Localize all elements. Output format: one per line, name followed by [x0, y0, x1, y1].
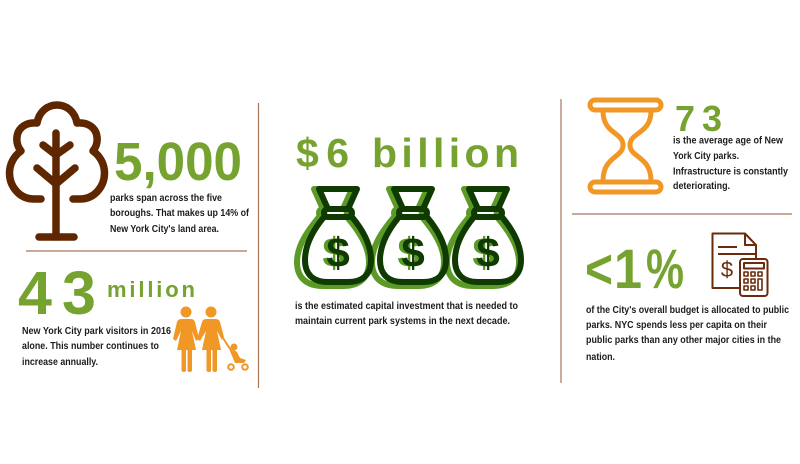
stat: 43 million: 3 — [62, 259, 96, 327]
text: parks description — [110, 193, 250, 235]
text: budget description: nation. — [586, 352, 615, 363]
text: investment description — [295, 301, 518, 327]
text: age description: York City parks. — [673, 151, 739, 162]
stat: 73: 7 — [675, 98, 695, 139]
text: investment description: maintain current park systems in the next decade. — [295, 316, 510, 327]
text: age description — [673, 136, 788, 192]
stat: 43 million: 4 — [18, 259, 52, 327]
text: age description: deteriorating. — [673, 181, 730, 192]
icon: hourglass — [590, 100, 661, 192]
text: age description: Infrastructure is constantly — [673, 166, 788, 178]
panel: six billion — [295, 130, 521, 327]
stat: <1%: < — [585, 237, 613, 300]
panel: parks — [10, 105, 250, 237]
stat: <1%: 1 — [614, 237, 642, 300]
text: visitors description: alone. This number continues to — [22, 341, 159, 352]
text: age description: is the average age of New — [673, 136, 783, 146]
text: budget description: public parks than any other major cities in the — [586, 335, 781, 346]
text: investment description: is the estimated capital investment that is needed to — [295, 301, 518, 312]
icon: money bags: $ — [472, 229, 496, 276]
text: parks description: boroughs. That makes up 14% of — [110, 208, 250, 219]
text: budget description: parks. NYC spends less per capita on their — [586, 320, 767, 331]
stat: 43 million: million — [107, 277, 195, 302]
icon: money bags: $ — [401, 229, 425, 276]
stat: 43 million — [18, 259, 195, 327]
text: parks description: New York City's land area. — [110, 224, 219, 235]
icon: money bags — [297, 189, 521, 286]
icon: money bags: $ — [476, 229, 500, 276]
icon: document and calculator — [712, 234, 768, 296]
text: budget description — [586, 305, 789, 363]
panel: visitors — [18, 259, 248, 372]
text: parks description: parks span across the five — [110, 193, 222, 204]
icon: tree — [10, 105, 104, 237]
stat: $6 billion — [296, 130, 519, 176]
icon: money bags: $ — [326, 229, 350, 276]
stat: <1%: % — [646, 237, 684, 300]
panel: budget — [585, 234, 789, 363]
stat: 73: 3 — [702, 98, 722, 139]
stat: $6 billion: billion — [372, 130, 519, 176]
icon: two people with stroller — [173, 306, 248, 372]
icon: money bags: $ — [322, 229, 346, 276]
panel: average age — [590, 98, 788, 192]
stat: 73 — [675, 98, 722, 139]
stat: $6 billion: $6 — [296, 130, 349, 176]
text: visitors description: New York City park visitors in 2016 — [22, 326, 172, 337]
text: visitors description — [22, 326, 172, 368]
stat: 5,000: 5,000 — [114, 132, 242, 192]
stat: <1% — [585, 237, 684, 300]
icon: money bags: $ — [397, 229, 421, 276]
text: visitors description: increase annually. — [22, 357, 98, 368]
icon: document and calculator: $ — [721, 257, 733, 282]
